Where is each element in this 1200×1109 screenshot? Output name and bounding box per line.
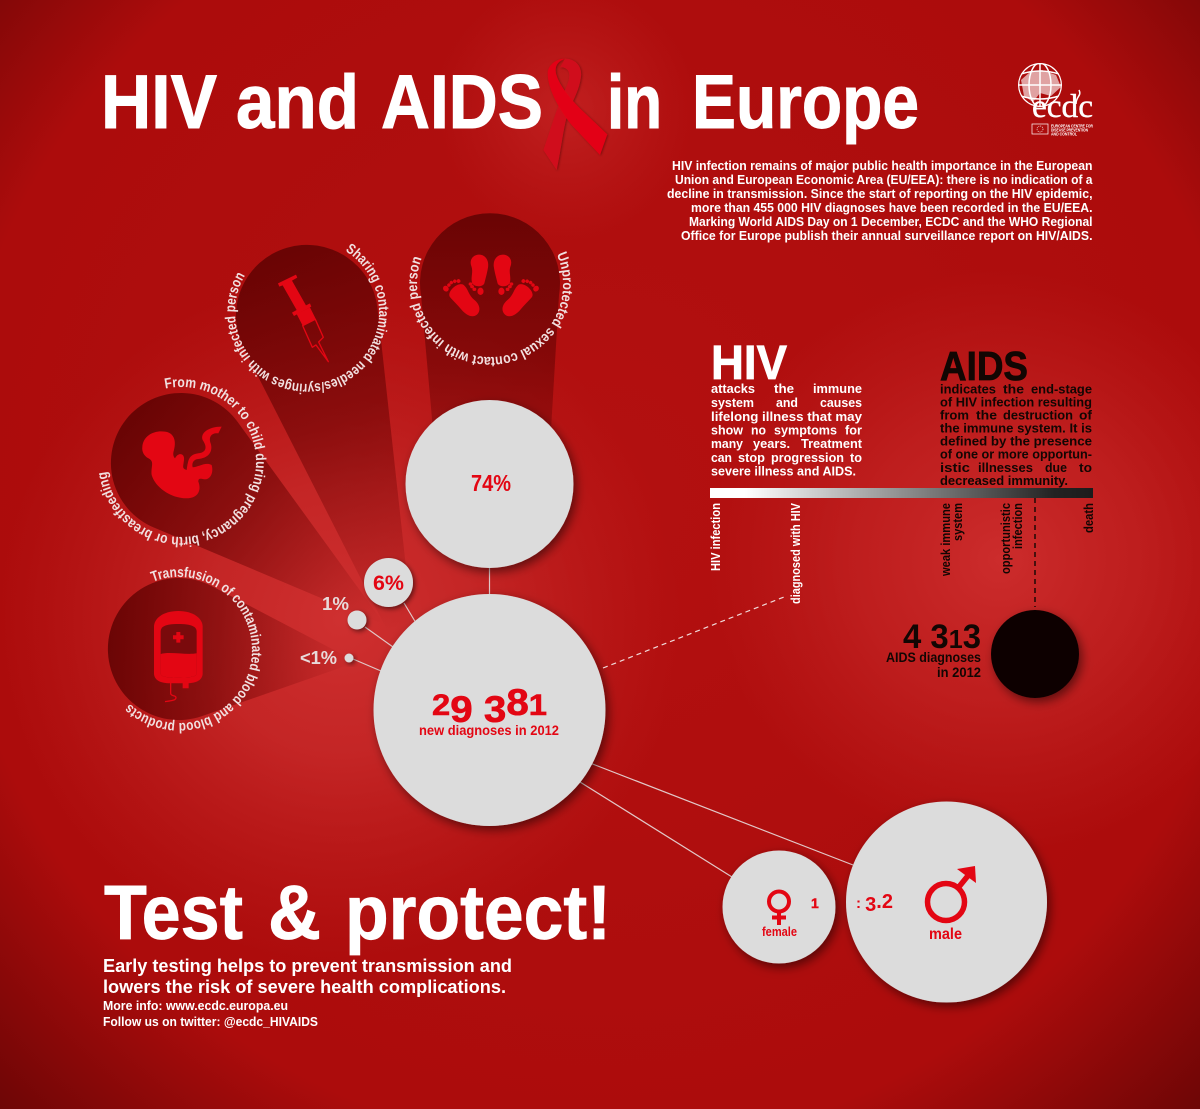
intro text: decline in transmission. Since the start of reporting on the HIV epidemic,	[667, 186, 1092, 201]
timeline labels: HIV infection	[709, 503, 723, 571]
bubble: 74 percent: 74%	[471, 470, 511, 496]
logo EU flag	[1032, 124, 1048, 134]
timeline labels: infection	[1011, 503, 1025, 549]
caption: new diagnoses: new diagnoses in 2012	[419, 722, 559, 738]
logo wordmark: ecdc	[1032, 89, 1093, 125]
bubble: 1 percent: 1%	[322, 594, 349, 614]
icon: footprints	[442, 255, 540, 321]
beam: transfusion	[108, 578, 357, 720]
icon: syringe	[278, 275, 328, 362]
panel: AIDS definition	[940, 343, 1093, 488]
number: AIDS diagnoses: in 2012	[937, 665, 981, 680]
number: AIDS diagnoses: 4	[903, 618, 921, 656]
curved label: mother to child: From mother to child during pregnancy, birth or breastfeeding	[99, 378, 266, 548]
title: and	[236, 60, 359, 145]
HIV paragraph: no	[751, 422, 766, 438]
AIDS paragraph: of	[1079, 408, 1093, 422]
beam: needles	[236, 245, 420, 695]
title: in	[607, 60, 662, 145]
intro text: more than 455 000 HIV diagnoses have been recorded in the EU/EEA.	[691, 200, 1092, 215]
HIV paragraph: many	[711, 436, 744, 451]
timeline labels: opportunistic	[999, 503, 1013, 574]
number: 29 381: 3	[484, 689, 506, 730]
AIDS paragraph: defined by the presence	[940, 434, 1092, 448]
headline: test and protect: protect!	[345, 870, 611, 956]
more info links	[103, 999, 318, 1029]
panel: HIV definition	[711, 337, 863, 478]
AIDS paragraph: the immune system. It is	[940, 420, 1092, 436]
title: Europe	[692, 60, 919, 145]
curved label: needles: Sharing contaminated needles/syringes with infected person	[224, 244, 388, 394]
AIDS paragraph: destruction	[1003, 408, 1073, 422]
panel: mother to child	[99, 378, 366, 611]
AIDS paragraph: decreased immunity.	[940, 473, 1068, 488]
bubble: 1 percent	[322, 594, 366, 630]
bubble: AIDS diagnoses	[991, 610, 1079, 698]
number: 29 381: 9	[450, 689, 473, 730]
icon: male symbol	[928, 866, 976, 920]
connector lines	[353, 566, 853, 877]
HIV paragraph: to	[850, 450, 862, 465]
AIDS paragraph: indicates	[940, 382, 996, 396]
number: AIDS diagnoses: 313	[930, 618, 982, 656]
intro text	[667, 158, 1093, 243]
panel: transfusion	[108, 566, 330, 734]
dashed link to timeline	[603, 597, 784, 668]
ratio: 1: 1	[811, 895, 819, 911]
HIV paragraph	[711, 381, 863, 478]
logo caption: EUROPEAN CENTRE FOR	[1051, 124, 1094, 128]
bubble: 6 percent	[364, 558, 413, 607]
label: female: female	[762, 925, 797, 939]
bubble: less than 1 percent: <1%	[300, 648, 337, 668]
logo globe	[1018, 63, 1062, 107]
beam: mother to child	[111, 393, 385, 625]
AIDS paragraph: end-stage	[1031, 382, 1092, 396]
HIV paragraph: years.	[753, 436, 790, 451]
number: 29 381: 1	[529, 689, 547, 722]
intro text: Marking World AIDS Day on 1 December, ECDC and the WHO Regional	[689, 214, 1092, 229]
HIV paragraph: can	[711, 450, 732, 465]
AIDS paragraph: from	[940, 408, 969, 422]
HIV paragraph: stop	[738, 450, 765, 465]
number: AIDS diagnoses	[886, 618, 981, 680]
curved label: transfusion: Transfusion of contaminated blood and blood products	[126, 566, 262, 734]
icon: blood bag	[154, 611, 203, 702]
number: AIDS diagnoses: AIDS diagnoses	[886, 650, 981, 665]
panel: unprotected sexual contact	[409, 213, 572, 426]
AIDS paragraph: the	[1003, 382, 1024, 396]
HIV paragraph: symptoms	[774, 422, 837, 438]
label: male: male	[929, 926, 962, 943]
HIV paragraph: attacks	[711, 381, 755, 396]
title: AIDS	[381, 60, 543, 145]
timeline labels: system	[951, 503, 965, 541]
HIV paragraph: show	[711, 422, 744, 438]
HIV paragraph: lifelong illness that may	[711, 409, 863, 424]
bubble: 6 percent: 6%	[373, 572, 404, 595]
bubble: new diagnoses	[374, 594, 606, 826]
bubble: less than 1 percent	[300, 648, 354, 668]
HIV paragraph: system	[711, 395, 754, 410]
HIV paragraph: progression	[771, 450, 844, 465]
HIV paragraph: immune	[813, 381, 862, 396]
curved label: sexual contact: Unprotected sexual contact with infected person	[409, 251, 572, 366]
HIV paragraph: the	[774, 381, 794, 396]
call to action: Early testing helps to prevent transmission and	[103, 955, 512, 976]
bubble: 74 percent	[406, 400, 574, 568]
intro text: Office for Europe publish their annual surveillance report on HIV/AIDS.	[681, 228, 1092, 243]
timeline labels: death	[1082, 503, 1096, 533]
HIV paragraph: severe illness and AIDS.	[711, 464, 856, 478]
timeline labels: diagnosed with HIV	[789, 502, 803, 604]
call to action: lowers the risk of severe health complications.	[103, 976, 506, 997]
bubble: male	[846, 802, 1047, 1002]
intro text: Union and European Economic Area (EU/EEA): there is no indication of a	[675, 172, 1093, 187]
headline: test and protect: &	[268, 870, 321, 956]
headline: test and protect: Test	[104, 870, 243, 956]
more info links: More info: www.ecdc.europa.eu	[103, 999, 288, 1013]
icon: red ribbon	[543, 59, 607, 170]
beam: sexual contact	[420, 213, 560, 430]
bubble: female	[722, 850, 836, 964]
logo curl	[1076, 90, 1080, 104]
logo caption: DISEASE PREVENTION	[1051, 128, 1088, 132]
logo caption: AND CONTROL	[1051, 132, 1077, 136]
ratio: 3.2: 3	[865, 894, 876, 916]
more info links: Follow us on twitter: @ecdc_HIVAIDS	[103, 1015, 318, 1029]
title: HIV	[101, 60, 217, 145]
panel: sharing needles	[224, 244, 406, 584]
AIDS paragraph: due	[1045, 460, 1067, 475]
ratio: 3.2: :	[856, 895, 865, 912]
AIDS paragraph: illnesses	[978, 460, 1033, 475]
headline: test and protect	[104, 870, 611, 956]
AIDS paragraph: the	[976, 408, 997, 422]
number: 29 381: 8	[506, 682, 529, 723]
intro text: HIV infection remains of major public health importance in the European	[672, 158, 1093, 173]
timeline labels	[709, 502, 1096, 604]
AIDS paragraph	[940, 382, 1093, 488]
panel: transmission routes	[99, 213, 572, 734]
number: 29 381: 2	[432, 689, 450, 722]
logo: ecdc	[1018, 63, 1094, 136]
dashed line to AIDS bubble	[1034, 498, 1036, 607]
timeline labels: weak immune	[939, 503, 953, 577]
ratio: 3.2: .2	[876, 891, 893, 913]
AIDS paragraph: of one or more opportun-	[940, 446, 1092, 462]
call to action	[103, 955, 512, 997]
HIV paragraph: and	[776, 395, 798, 410]
HIV paragraph: for	[845, 422, 862, 438]
AIDS paragraph: to	[1079, 460, 1092, 475]
AIDS paragraph: of HIV infection resulting	[940, 394, 1092, 410]
icon: female symbol	[769, 892, 789, 925]
heading: AIDS: AIDS	[940, 343, 1028, 389]
icon: fetus	[142, 427, 222, 498]
logo caption	[1051, 124, 1094, 136]
HIV paragraph: Treatment	[801, 436, 863, 451]
timeline bar	[710, 488, 1093, 498]
HIV paragraph: causes	[820, 395, 862, 410]
AIDS paragraph: istic	[940, 460, 970, 475]
title	[101, 60, 919, 145]
heading: HIV: HIV	[711, 337, 787, 390]
